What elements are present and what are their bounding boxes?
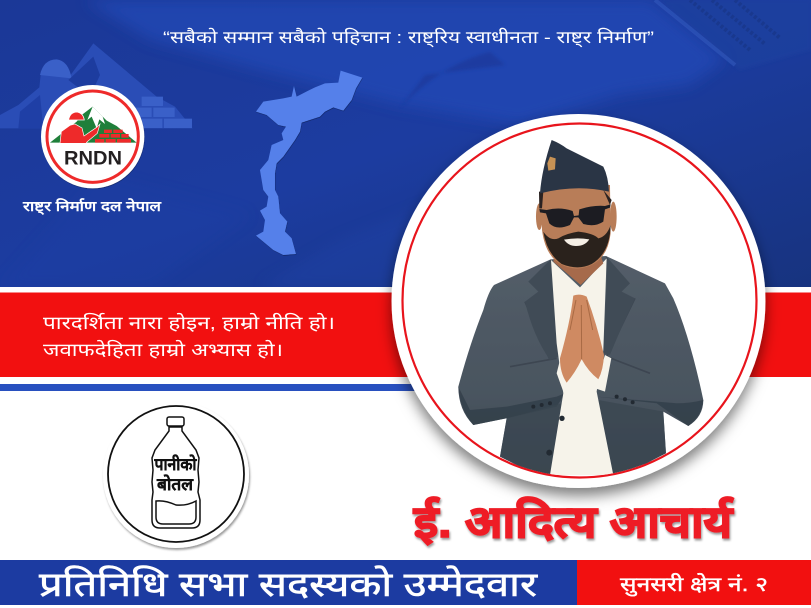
map of constituency <box>256 71 362 255</box>
bottle <box>152 417 200 528</box>
party name: राष्ट्र निर्माण दल नेपाल <box>22 198 162 215</box>
candidate photo <box>458 140 703 475</box>
bottom bar left <box>0 560 577 605</box>
red slogan band with white edges <box>0 287 811 391</box>
bottle label: पानीको <box>154 454 197 474</box>
hair <box>539 190 612 208</box>
slogan text: पारदर्शिता नारा होइन, हाम्रो नीति हो। <box>43 312 335 333</box>
slogan text <box>43 312 335 360</box>
logo mountain <box>50 107 137 143</box>
candidacy title: प्रतिनिधि सभा सदस्यको उम्मेदवार <box>39 565 538 604</box>
slogan text: जवाफदेहिता हाम्रो अभ्यास हो। <box>43 339 283 360</box>
neck <box>553 258 604 285</box>
logo watermark <box>0 43 193 128</box>
quote headline: “सबैको सम्मान सबैको पहिचान : राष्ट्रिय स्वाधीनता - राष्ट्र निर्माण” <box>163 27 654 48</box>
cap <box>540 140 609 193</box>
election symbol: बोतल <box>156 474 194 494</box>
face <box>542 185 611 269</box>
logo bricks <box>95 130 131 143</box>
shirt <box>550 258 613 475</box>
election symbol <box>103 402 249 548</box>
bottom bar right <box>577 560 811 605</box>
logo initials: RNDN <box>64 149 122 170</box>
candidate name: ई. आदित्य आचार्य <box>413 496 734 547</box>
forearm shading <box>458 387 703 426</box>
smile <box>564 238 589 246</box>
beard <box>543 225 611 267</box>
blue header background <box>0 0 811 287</box>
cap badge <box>547 157 556 171</box>
sleeve seams <box>510 298 650 373</box>
sunglasses <box>539 204 611 227</box>
ears <box>536 203 543 230</box>
logo worker <box>60 112 100 143</box>
candidate portrait circle <box>392 114 766 488</box>
jacket buttons <box>531 395 635 456</box>
cuffs <box>557 355 611 392</box>
lapels <box>525 256 635 360</box>
constituency: सुनसरी क्षेत्र नं. २ <box>620 573 768 597</box>
jacket <box>458 256 703 475</box>
party logo <box>41 85 144 188</box>
hands <box>560 295 604 383</box>
